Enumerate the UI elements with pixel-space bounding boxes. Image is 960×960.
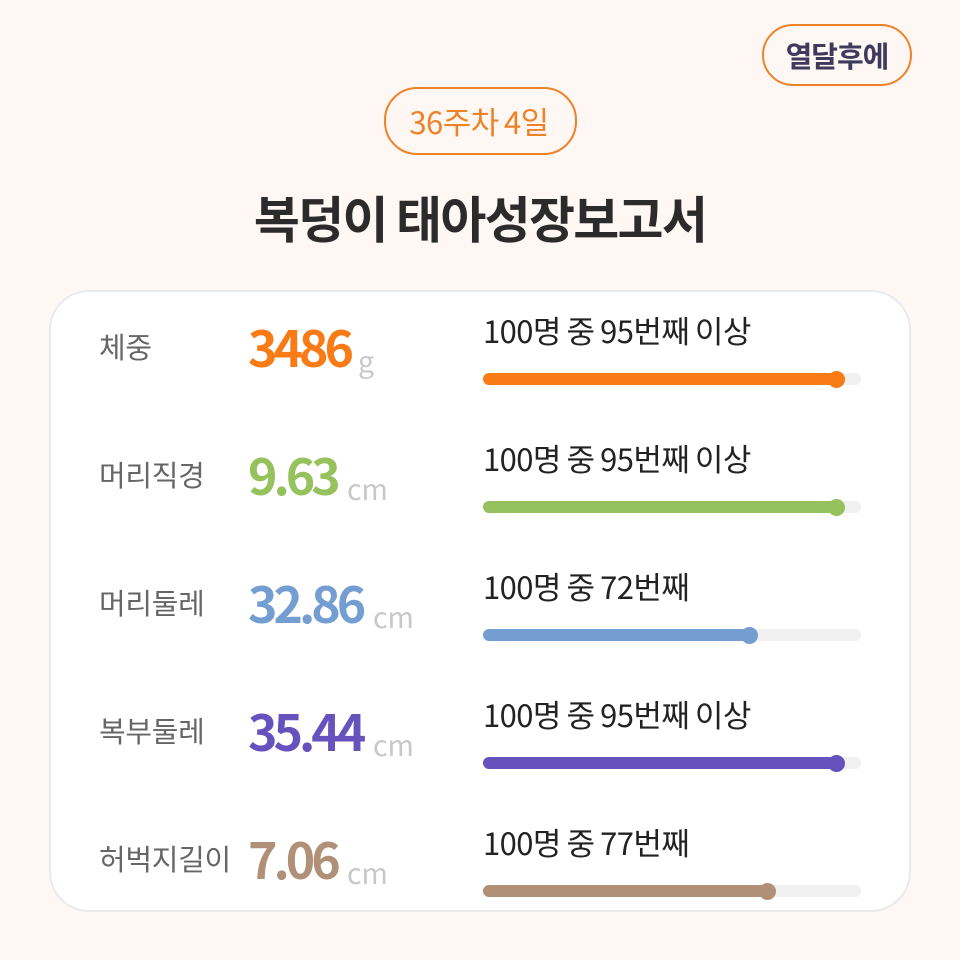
row: abdominal circumference: 100명 중 95번째 이상	[483, 691, 751, 736]
row: thigh length: 7.06	[248, 822, 337, 894]
row: head circumference: 100명 중 72번째	[483, 563, 689, 608]
row: weight	[99, 307, 861, 388]
row: weight: 100명 중 95번째 이상	[483, 307, 751, 352]
brand badge	[762, 24, 912, 86]
brand badge: 열달후에	[786, 34, 888, 76]
row: thigh length	[99, 819, 861, 900]
row: head diameter: 100명 중 95번째 이상	[483, 435, 751, 480]
row: abdominal circumference: 35.44	[248, 694, 362, 766]
row: head diameter: 9.63	[248, 438, 337, 510]
row: thigh length: 100명 중 77번째	[483, 819, 689, 864]
row: head diameter	[99, 435, 861, 516]
row: head circumference: 32.86	[248, 566, 362, 638]
row: weight: 3486	[248, 310, 350, 382]
row: abdominal circumference: cm	[373, 724, 414, 765]
row: weight: g	[358, 340, 374, 381]
title: 복덩이 태아성장보고서	[254, 181, 706, 253]
row: head diameter: cm	[347, 468, 388, 509]
week badge: 36주차 4일	[409, 98, 549, 143]
row: head circumference: cm	[373, 596, 414, 637]
row: thigh length: 허벅지길이	[99, 837, 231, 879]
row: head circumference: 머리둘레	[99, 581, 205, 623]
row: weight: 체중	[99, 325, 152, 367]
panel: measurements	[49, 290, 911, 912]
row: thigh length: cm	[347, 852, 388, 893]
row: abdominal circumference	[99, 691, 861, 772]
row: head circumference	[99, 563, 861, 644]
row: abdominal circumference: 복부둘레	[99, 709, 205, 751]
row: head diameter: 머리직경	[99, 453, 205, 495]
week badge	[384, 87, 577, 155]
